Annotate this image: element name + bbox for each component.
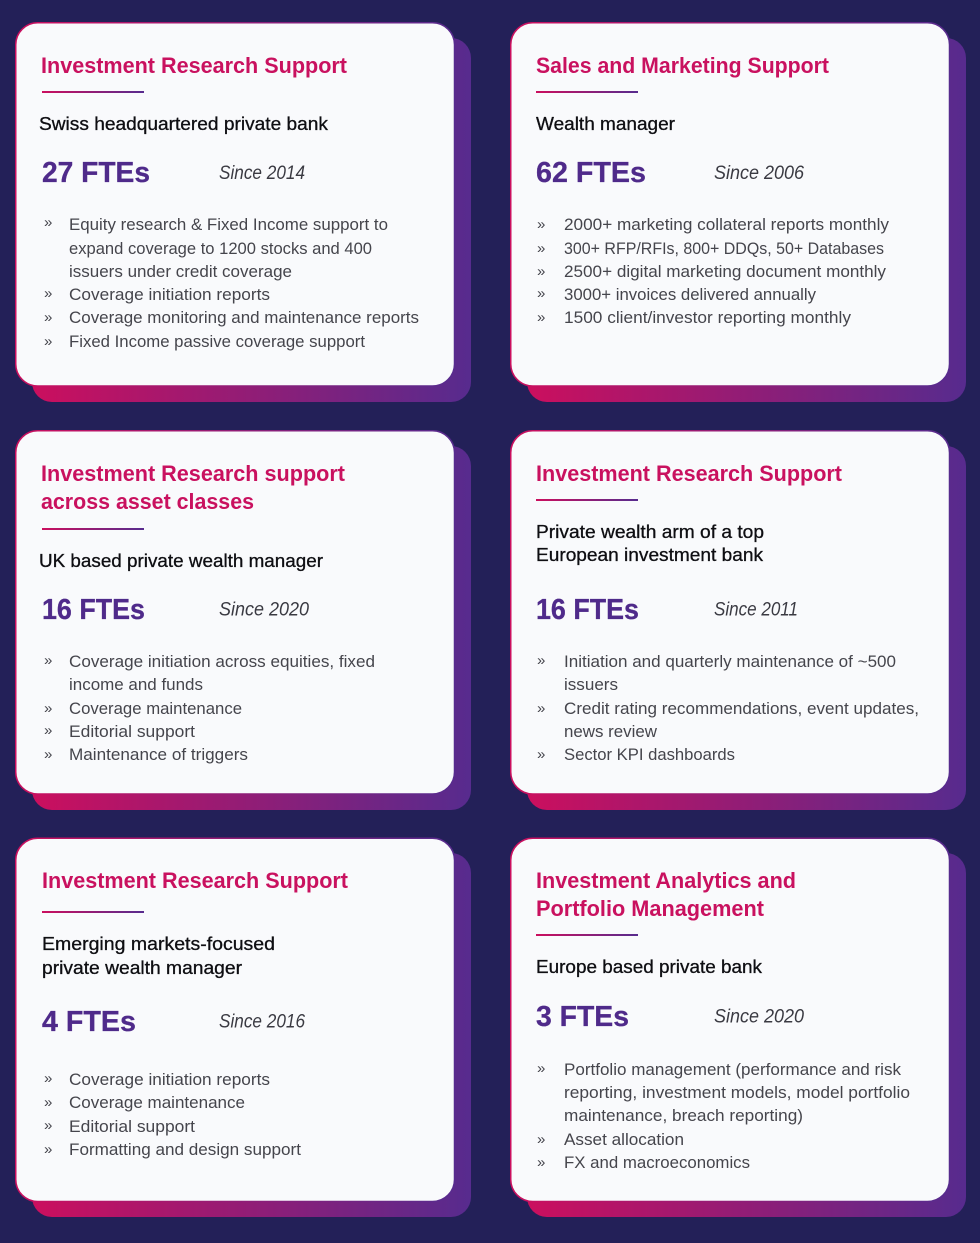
heading <box>41 461 345 514</box>
heading underline <box>536 934 638 936</box>
client: Europe based private bank <box>536 957 763 977</box>
panel: investment research support, Swiss private bank <box>16 23 471 402</box>
bullet list: » <box>537 652 545 669</box>
bullet list <box>44 652 375 764</box>
bullet list: Fixed Income passive coverage support <box>69 333 365 351</box>
heading: Investment Research Support <box>536 461 842 486</box>
panel: sales and marketing support, wealth manager <box>511 23 966 402</box>
bullet list: Credit rating recommendations, event updates, <box>564 700 919 718</box>
bullet list: Coverage monitoring and maintenance reports <box>69 309 419 327</box>
bullet list: 2000+ marketing collateral reports monthly <box>564 216 890 234</box>
heading underline <box>536 91 638 93</box>
bullet list: income and funds <box>69 676 203 694</box>
heading: across asset classes <box>41 489 254 514</box>
bullet list: » <box>537 240 545 257</box>
card shadow <box>527 853 966 1217</box>
heading: Portfolio Management <box>536 896 764 921</box>
bullet list: Coverage maintenance <box>69 700 242 718</box>
card body <box>16 838 454 1202</box>
bullet list: Coverage initiation reports <box>69 286 270 304</box>
FTE count: 3 FTEs <box>536 1001 629 1033</box>
card shadow <box>527 446 966 810</box>
bullet list: FX and macroeconomics <box>564 1154 750 1172</box>
bullet list <box>44 1070 301 1159</box>
bullet list: Formatting and design support <box>69 1141 301 1159</box>
bullet list: » <box>44 700 52 717</box>
panel: investment analytics and portfolio management <box>511 838 966 1217</box>
bullet list: Coverage initiation reports <box>69 1071 270 1089</box>
bullet list <box>537 1060 910 1172</box>
bullet list: 3000+ invoices delivered annually <box>564 286 817 304</box>
card shadow <box>32 446 471 810</box>
client: Private wealth arm of a top <box>536 522 764 542</box>
bullet list: Asset allocation <box>564 1131 684 1149</box>
bullet list: » <box>537 1154 545 1171</box>
bullet list: » <box>537 216 545 233</box>
bullet list: » <box>44 333 52 350</box>
card body <box>16 431 454 794</box>
card shadow <box>527 38 966 402</box>
bullet list: expand coverage to 1200 stocks and 400 <box>69 240 372 258</box>
heading underline <box>536 499 638 501</box>
bullet list: » <box>44 1070 52 1087</box>
bullet list: » <box>44 1094 52 1111</box>
bullet list: » <box>537 263 545 280</box>
bullet list: Coverage maintenance <box>69 1094 245 1112</box>
bullet list: issuers under credit coverage <box>69 263 292 281</box>
heading: Sales and Marketing Support <box>536 53 829 78</box>
bullet list: news review <box>564 723 657 741</box>
bullet list: » <box>537 1131 545 1148</box>
card shadow <box>32 853 471 1217</box>
heading <box>536 868 796 921</box>
bullet list: » <box>44 746 52 763</box>
client: Wealth manager <box>536 114 675 134</box>
bullet list: Editorial support <box>69 723 195 741</box>
FTE count: 27 FTEs <box>42 157 150 189</box>
heading: Investment Analytics and <box>536 868 796 893</box>
since year: Since 2020 <box>714 1006 804 1028</box>
bullet list: Maintenance of triggers <box>69 746 248 764</box>
bullet list <box>44 214 419 351</box>
panel: investment research support, emerging markets <box>16 838 471 1217</box>
since year: Since 2016 <box>219 1012 305 1032</box>
bullet list: 1500 client/investor reporting monthly <box>564 309 852 327</box>
bullet list: Sector KPI dashboards <box>564 746 735 764</box>
since year: Since 2006 <box>714 163 804 184</box>
FTE count: 16 FTEs <box>42 594 145 626</box>
heading underline <box>42 911 144 913</box>
card body <box>511 838 950 1202</box>
bullet list: Portfolio management (performance and risk <box>564 1061 902 1079</box>
bullet list: 300+ RFP/RFIs, 800+ DDQs, 50+ Databases <box>564 240 884 258</box>
heading: Investment Research Support <box>42 868 348 893</box>
bullet list: » <box>44 722 52 739</box>
since year: Since 2011 <box>714 600 798 620</box>
heading: Investment Research support <box>41 461 345 486</box>
bullet list: Initiation and quarterly maintenance of ~500 <box>564 653 896 671</box>
client: private wealth manager <box>42 958 242 978</box>
bullet list <box>537 652 919 764</box>
bullet list: » <box>44 1141 52 1158</box>
bullet list: issuers <box>564 676 618 694</box>
bullet list <box>537 216 890 327</box>
since year: Since 2014 <box>219 163 305 184</box>
card body <box>16 23 454 386</box>
bullet list: » <box>44 214 52 231</box>
bullet list: » <box>537 700 545 717</box>
bullet list: » <box>44 652 52 669</box>
card body <box>511 23 950 386</box>
heading underline <box>42 91 144 93</box>
bullet list: » <box>44 285 52 302</box>
bullet list: » <box>537 285 545 302</box>
bullet list: » <box>537 1060 545 1077</box>
bullet list: » <box>44 1117 52 1134</box>
since year: Since 2020 <box>219 600 309 620</box>
heading: Investment Research Support <box>41 53 347 78</box>
client: Swiss headquartered private bank <box>39 114 329 134</box>
bullet list: Editorial support <box>69 1118 195 1136</box>
bullet list: » <box>44 309 52 326</box>
bullet list: » <box>537 309 545 326</box>
panel: investment research across asset classes, UK wealth manager <box>16 431 471 810</box>
client: European investment bank <box>536 545 764 565</box>
card shadow <box>32 38 471 402</box>
client <box>536 522 764 565</box>
card body <box>511 431 950 794</box>
bullet list: Equity research & Fixed Income support to <box>69 216 388 234</box>
FTE count: 62 FTEs <box>536 157 646 189</box>
client: UK based private wealth manager <box>39 551 323 571</box>
FTE count: 16 FTEs <box>536 594 639 626</box>
client <box>42 934 275 978</box>
bullet list: reporting, investment models, model portfolio <box>564 1084 910 1102</box>
bullet list: » <box>537 746 545 763</box>
client: Emerging markets-focused <box>42 934 275 954</box>
heading underline <box>42 528 144 530</box>
bullet list: Coverage initiation across equities, fixed <box>69 653 375 671</box>
FTE count: 4 FTEs <box>42 1006 136 1038</box>
bullet list: maintenance, breach reporting) <box>564 1107 803 1125</box>
panel: investment research support, private wealth arm <box>511 431 966 810</box>
bullet list: 2500+ digital marketing document monthly <box>564 263 887 281</box>
